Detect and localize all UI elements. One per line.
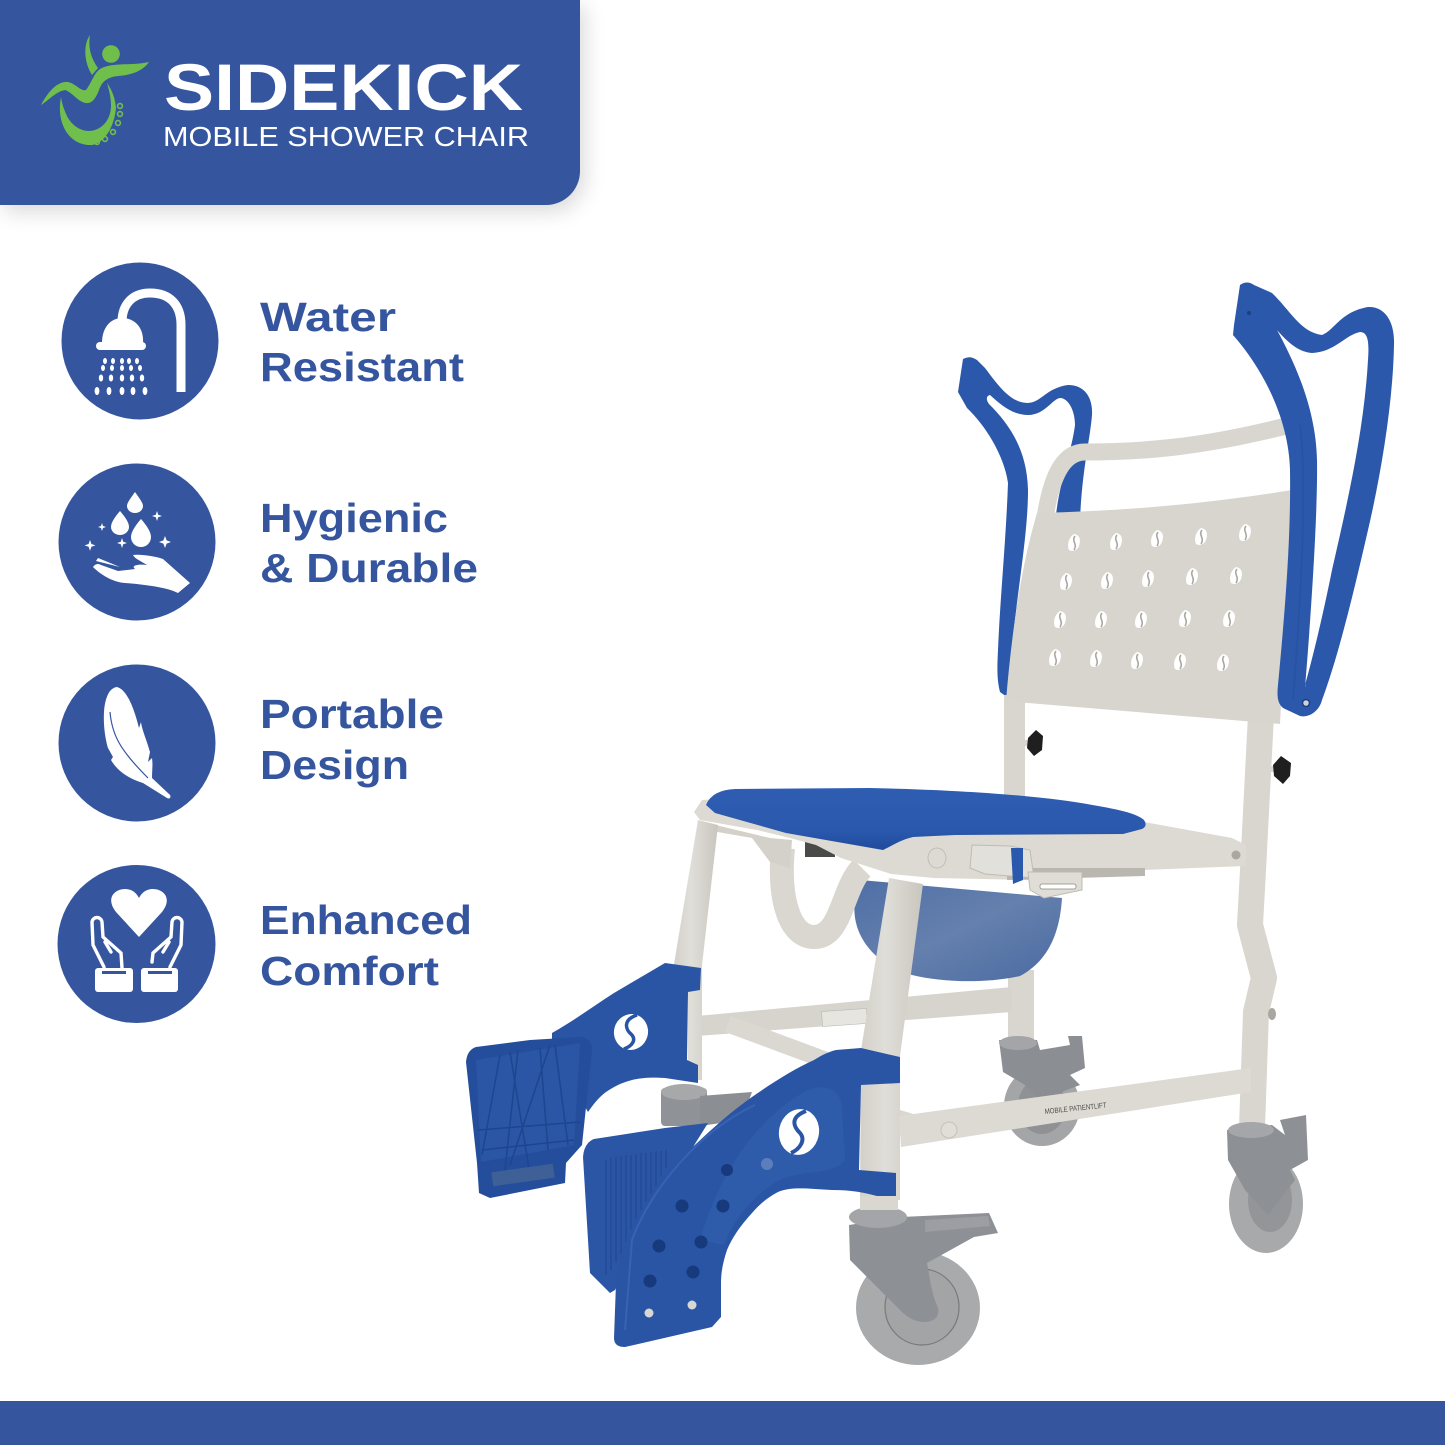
post side hole <box>1268 1008 1276 1020</box>
footer bar <box>0 1401 1445 1445</box>
rear right caster <box>1227 1115 1308 1253</box>
far foot plate bracket <box>552 963 701 1112</box>
icon: hands and heart <box>58 865 216 1023</box>
dark clip <box>805 840 835 857</box>
bracket connector <box>703 822 792 868</box>
heading: Water Resistant: Water <box>260 294 396 340</box>
rear right post <box>1250 715 1264 1128</box>
heading: Enhanced Comfort <box>260 897 472 994</box>
heading: Enhanced Comfort: Comfort <box>260 948 439 994</box>
back lower rail <box>697 987 1012 1036</box>
front rail <box>899 1068 1251 1147</box>
heading: Water Resistant: Resistant <box>260 344 464 390</box>
rail label <box>822 1008 868 1027</box>
bucket <box>854 880 1062 981</box>
icon: hand and drops <box>58 464 216 620</box>
near foot bracket <box>614 1048 900 1347</box>
left armrest handle <box>958 357 1092 697</box>
brand name: SIDEKICK <box>164 50 523 124</box>
icon: shower <box>62 262 218 420</box>
diagonal rail <box>728 1024 825 1060</box>
adjustment knob right <box>1268 756 1291 784</box>
heading: Enhanced Comfort: Enhanced <box>260 897 472 943</box>
seat cushion <box>706 788 1146 850</box>
rear left lower post <box>1008 970 1034 1045</box>
heading: Portable Design: Portable <box>260 691 444 737</box>
heading: Hygienic & Durable: Hygienic <box>260 495 448 541</box>
logo mark <box>41 35 149 145</box>
upper left post <box>1004 695 1025 800</box>
heading: Hygienic & Durable: & Durable <box>260 545 478 591</box>
backrest holes <box>1049 524 1251 671</box>
near front leg <box>860 878 923 1200</box>
feature list <box>58 262 478 1023</box>
heading: Hygienic & Durable <box>260 495 478 591</box>
header panel <box>0 0 580 205</box>
far front leg <box>673 820 718 1080</box>
backrest frame tube <box>1045 425 1290 518</box>
heading: Water Resistant <box>260 294 464 390</box>
chair logo text: MOBILE PATIENTLIFT <box>1044 1101 1107 1116</box>
far foot plate <box>466 1037 592 1198</box>
heading: Portable Design <box>260 691 444 788</box>
heading: Portable Design: Design <box>260 742 409 788</box>
seat base <box>694 795 1246 898</box>
subtitle: MOBILE SHOWER CHAIR <box>163 121 529 152</box>
far caster <box>661 1084 752 1126</box>
rear left caster <box>999 1036 1085 1146</box>
adjustment knob left <box>1022 730 1043 756</box>
near front caster <box>849 1196 998 1365</box>
U bracket <box>782 848 862 937</box>
right armrest handle <box>1233 282 1394 716</box>
near foot plate <box>583 1123 708 1293</box>
icon: feather <box>58 664 216 822</box>
backrest panel <box>1006 490 1292 724</box>
